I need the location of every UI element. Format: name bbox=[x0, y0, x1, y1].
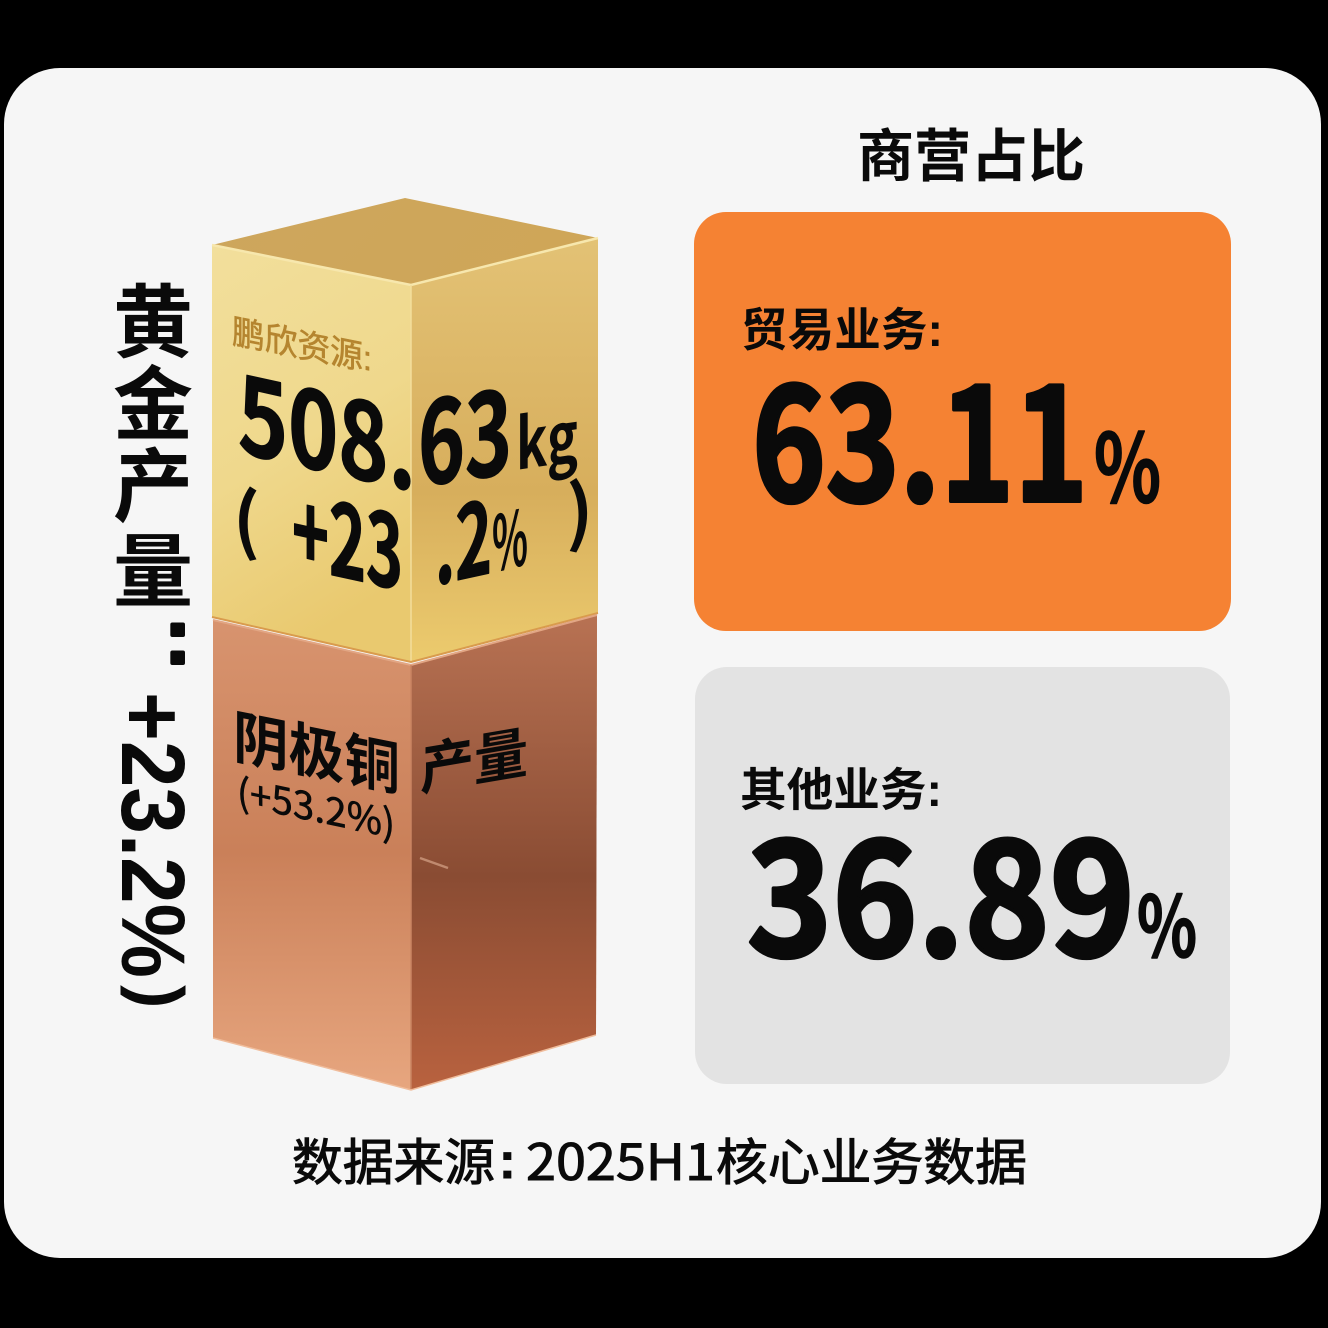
footer source note: 2025H1 bbox=[526, 1123, 715, 1195]
trade percent sign: % bbox=[1094, 394, 1161, 530]
gold value: 63 bbox=[418, 340, 512, 519]
gold cube label: company: 鹏欣资源: bbox=[232, 313, 372, 379]
gold growth rate: ) bbox=[566, 451, 593, 561]
vertical heading: gold output: 产 bbox=[113, 443, 193, 532]
other percent sign: % bbox=[1137, 861, 1197, 982]
gold value: 508. bbox=[238, 329, 416, 522]
gold value: kg bbox=[516, 380, 578, 491]
gold value bbox=[238, 329, 578, 522]
footer source note: 核心业务数据 bbox=[716, 1135, 1027, 1191]
footer source note: : bbox=[499, 1133, 516, 1189]
vertical heading: gold output: 量 bbox=[113, 528, 193, 617]
trade label: 贸易业务: bbox=[741, 304, 943, 356]
vertical heading: gold output: 金 bbox=[113, 361, 193, 450]
vertical heading: gold output: 黄 bbox=[113, 279, 193, 368]
other label: 其他业务: bbox=[740, 764, 942, 816]
vertical heading: gold output: : bbox=[165, 595, 190, 680]
vertical heading: gold output: +23.2% bbox=[102, 692, 202, 978]
right column heading: 商营占比 bbox=[857, 125, 1085, 189]
vertical heading: gold output bbox=[102, 279, 202, 1008]
footer source note: 数据来源 bbox=[292, 1135, 495, 1191]
gold growth rate bbox=[233, 451, 593, 620]
copper label bbox=[233, 706, 528, 803]
copper label: 阴极铜 bbox=[233, 706, 400, 803]
gold growth rate: +23 bbox=[292, 451, 403, 620]
vertical heading: gold output: ) bbox=[120, 985, 198, 1008]
copper growth rate: (+53.2%) bbox=[237, 761, 395, 850]
panel: trade business bbox=[694, 212, 1231, 631]
trade value: 63.11 bbox=[752, 320, 1088, 546]
gold growth rate: ( bbox=[233, 460, 260, 569]
gold growth rate: % bbox=[492, 477, 528, 595]
panel: other business bbox=[695, 667, 1230, 1084]
copper cube bbox=[213, 615, 597, 1090]
footer source note bbox=[292, 1123, 1027, 1195]
other value: 36.89 bbox=[747, 775, 1135, 1001]
copper label: 产量 bbox=[420, 721, 528, 802]
gold growth rate: .2 bbox=[435, 458, 492, 615]
gold cube bbox=[212, 198, 598, 662]
